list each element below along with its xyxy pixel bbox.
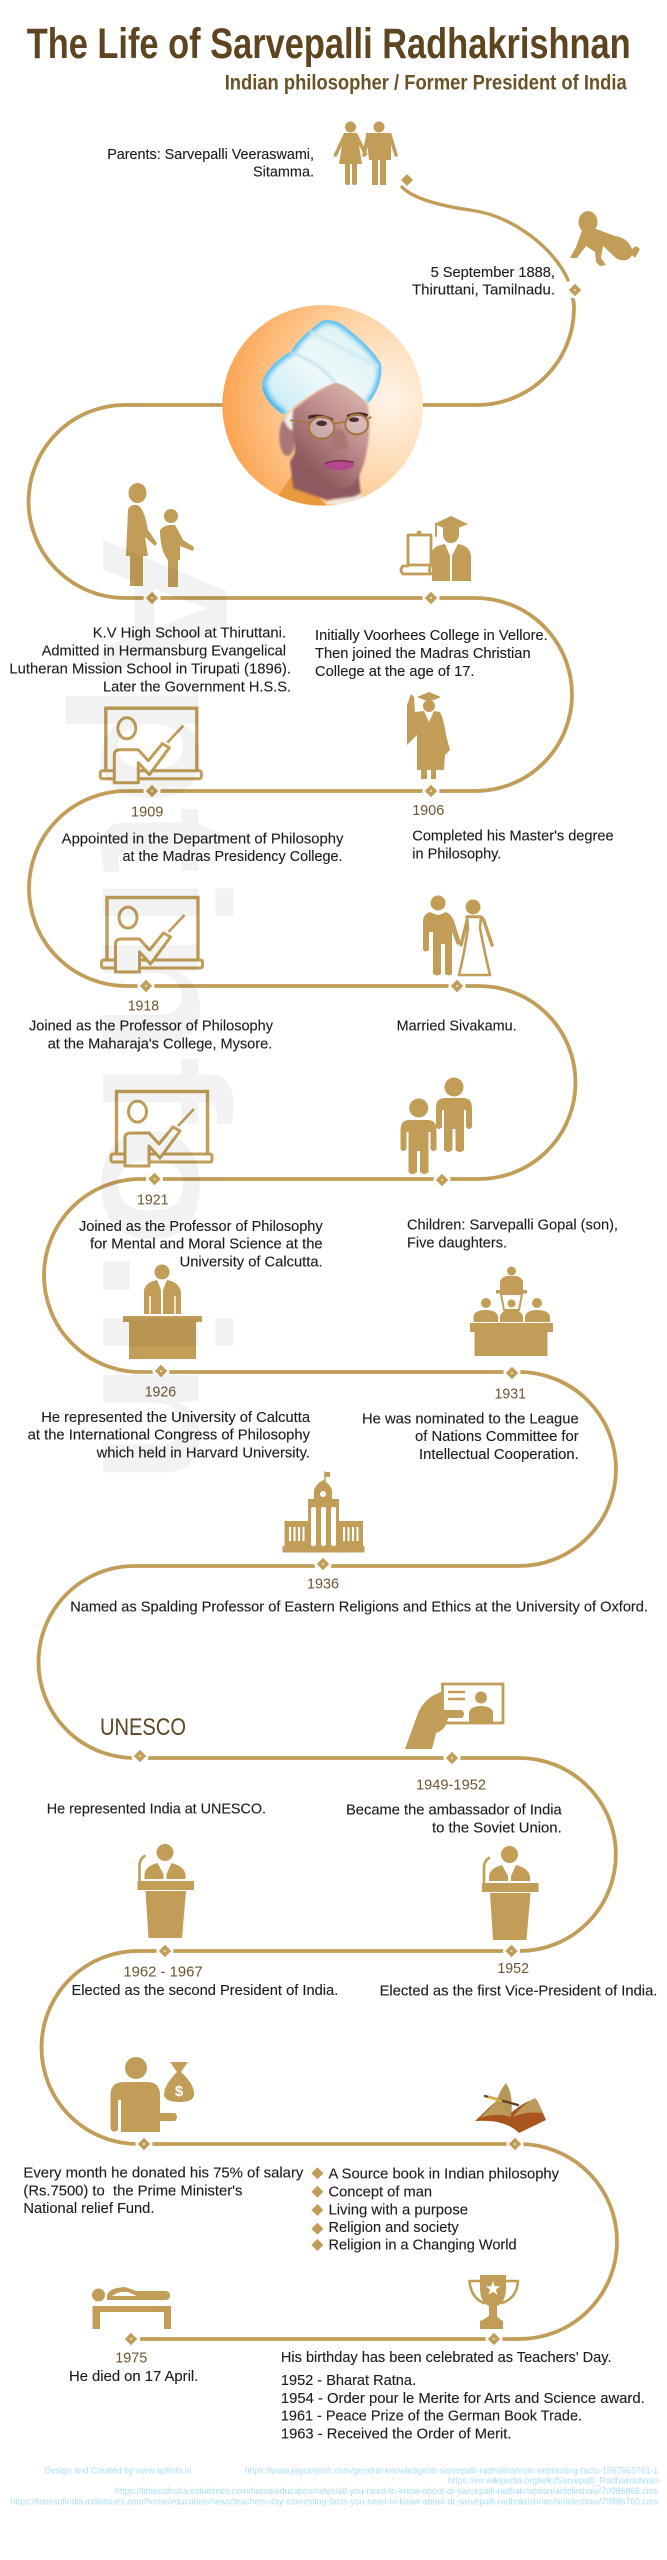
text: college: Then joined the Madras Christian — [315, 646, 531, 662]
text: calcutta: University of Calcutta. — [180, 1254, 323, 1270]
text: college — [315, 628, 548, 680]
watermark: Aptinfo.in — [64, 535, 265, 1485]
text: presidency college: Appointed in the Department of Philosophy — [62, 831, 344, 847]
icon: crawling baby — [570, 211, 640, 266]
icon: graduate in gown — [407, 692, 450, 779]
text: harvard: He represented the University of Calcutta — [41, 1410, 311, 1426]
text: teachers day and awards: 1954 - Order pour le Merite for Arts and Science award. — [281, 2391, 645, 2407]
text: league of nations — [362, 1411, 579, 1463]
year: 1921: 1921 — [137, 1192, 168, 1208]
text: maharaja college: at the Maharaja's College, Mysore. — [48, 1036, 272, 1052]
text: presidency college: at the Madras Presidency College. — [122, 849, 342, 865]
text: harvard: which held in Harvard University. — [96, 1446, 310, 1462]
icon: speaker at podium, president — [138, 1844, 194, 1938]
text: teachers day and awards: 1961 - Peace Prize of the German Book Trade. — [281, 2409, 582, 2425]
text: birth: Thiruttani, Tamilnadu. — [412, 283, 555, 299]
text: college: Initially Voorhees College in Vellore. — [315, 628, 548, 644]
text: donation — [23, 2166, 304, 2217]
text: ambassador: to the Soviet Union. — [432, 1820, 562, 1836]
text: teachers day and awards: His birthday has been celebrated as Teachers' Day. — [281, 2350, 612, 2366]
icon: teacher at board 1921 — [111, 1092, 212, 1166]
icon: teacher at board 1909 — [100, 708, 201, 783]
text: unesco: He represented India at UNESCO. — [47, 1802, 266, 1818]
text: donation: Every month he donated his 75% of salary — [23, 2166, 304, 2182]
text: president: Elected as the second President of India. — [72, 1983, 338, 1999]
text: teachers day and awards: 1952 - Bharat Ratna. — [281, 2373, 416, 2389]
text: parents: Sitamma. — [253, 165, 314, 181]
icon: university building — [282, 1472, 364, 1552]
text: presidency college — [62, 831, 344, 865]
text: teachers day and awards: 1963 - Received the Order of Merit. — [281, 2426, 512, 2442]
text: oxford: Named as Spalding Professor of Eastern Religions and Ethics at the University of Oxford. — [70, 1600, 648, 1616]
icon: teacher at board 1918 — [102, 898, 202, 972]
icon: committee — [470, 1266, 553, 1356]
text: ambassador — [346, 1803, 563, 1836]
year: 1936: 1936 — [307, 1576, 339, 1592]
text: parents: Parents: Sarvepalli Veeraswami, — [107, 147, 314, 163]
text: calcutta — [79, 1219, 323, 1270]
text: league of nations: of Nations Committee for — [415, 1429, 579, 1445]
timeline path — [29, 187, 617, 2339]
list: books: Living with a purpose — [328, 2202, 468, 2218]
text: birth: 5 September 1888, — [431, 265, 555, 281]
text: maharaja college: Joined as the Professor of Philosophy — [29, 1019, 274, 1035]
text: children: Five daughters. — [407, 1235, 507, 1251]
list: books: Religion and society — [328, 2220, 459, 2236]
portrait of Radhakrishnan — [222, 305, 423, 506]
text: college: College at the age of 17. — [315, 664, 474, 680]
text: school: Admitted in Hermansburg Evangelical — [42, 643, 286, 659]
text: league of nations: Intellectual Cooperation. — [419, 1447, 579, 1463]
label: UNESCO: UNESCO — [100, 1714, 186, 1741]
text: school: K.V High School at Thiruttani. — [93, 625, 286, 641]
icon: person on bed — [92, 2287, 171, 2329]
icon: donor with money bag: $ — [175, 2083, 184, 2100]
text: marriage: Married Sivakamu. — [397, 1019, 517, 1035]
icon: open book with pen — [475, 2083, 546, 2133]
year: 1926: 1926 — [145, 1385, 176, 1401]
icon: children — [400, 1078, 472, 1174]
text: league of nations: He was nominated to the League — [362, 1411, 579, 1427]
year: 1931: 1931 — [494, 1387, 526, 1403]
year: 1962-1967: 1962 - 1967 — [123, 1964, 203, 1980]
text: harvard — [28, 1410, 311, 1462]
icon: speaker at desk — [123, 1264, 202, 1359]
text: masters degree: Completed his Master's degree — [412, 829, 614, 845]
text: maharaja college — [29, 1019, 274, 1052]
icon: speaker at podium, vice-president — [482, 1846, 538, 1940]
list: books: Concept of man — [328, 2184, 432, 2200]
text: calcutta: Joined as the Professor of Philosophy — [79, 1219, 323, 1235]
text: children — [407, 1217, 618, 1251]
icon: parents — [336, 122, 396, 185]
text: ambassador: Became the ambassador of India — [346, 1803, 563, 1819]
year: 1918: 1918 — [128, 999, 159, 1015]
icon: adult and child — [126, 483, 194, 587]
timeline markers — [122, 174, 584, 2348]
footer credits and sources — [11, 2465, 658, 2507]
year: 1975: 1975 — [115, 2351, 147, 2367]
text: parents — [107, 147, 314, 181]
text: vice president: Elected as the first Vice-President of India. — [380, 1984, 657, 2000]
text: donation: National relief Fund. — [23, 2201, 154, 2217]
footer credits and sources: Design and Created by www.aptinfo.in — [45, 2465, 192, 2476]
text: calcutta: for Mental and Moral Science at the — [90, 1237, 323, 1253]
text: harvard: at the International Congress of Philosophy — [28, 1428, 311, 1444]
text: teachers day and awards — [281, 2350, 645, 2442]
icon: donor with money bag — [110, 2057, 194, 2132]
text: school: Later the Government H.S.S. — [103, 679, 291, 695]
year: 1906: 1906 — [412, 803, 444, 819]
icon: bride and groom — [423, 896, 492, 976]
icon: graduate with scroll — [401, 516, 471, 581]
year: 1952: 1952 — [497, 1961, 529, 1977]
text: donation: (Rs.7500) to the Prime Minister's — [23, 2183, 242, 2199]
list: books — [311, 2166, 560, 2254]
text: school — [9, 625, 291, 695]
list: books: Religion in a Changing World — [328, 2238, 517, 2254]
text: death: He died on 17 April. — [69, 2369, 198, 2385]
text: children: Children: Sarvepalli Gopal (son), — [407, 1217, 618, 1233]
year: 1909: 1909 — [131, 805, 163, 821]
list: books: A Source book in Indian philosophy — [328, 2166, 560, 2182]
text: masters degree: in Philosophy. — [412, 846, 501, 862]
text: masters degree — [412, 829, 614, 862]
icon: trophy — [470, 2275, 518, 2329]
text: school: Lutheran Mission School in Tirupati (1896). — [9, 661, 291, 677]
year: 1949-1952: 1949-1952 — [416, 1777, 486, 1793]
text: birth — [412, 265, 555, 299]
icon: hand with card — [405, 1684, 503, 1749]
